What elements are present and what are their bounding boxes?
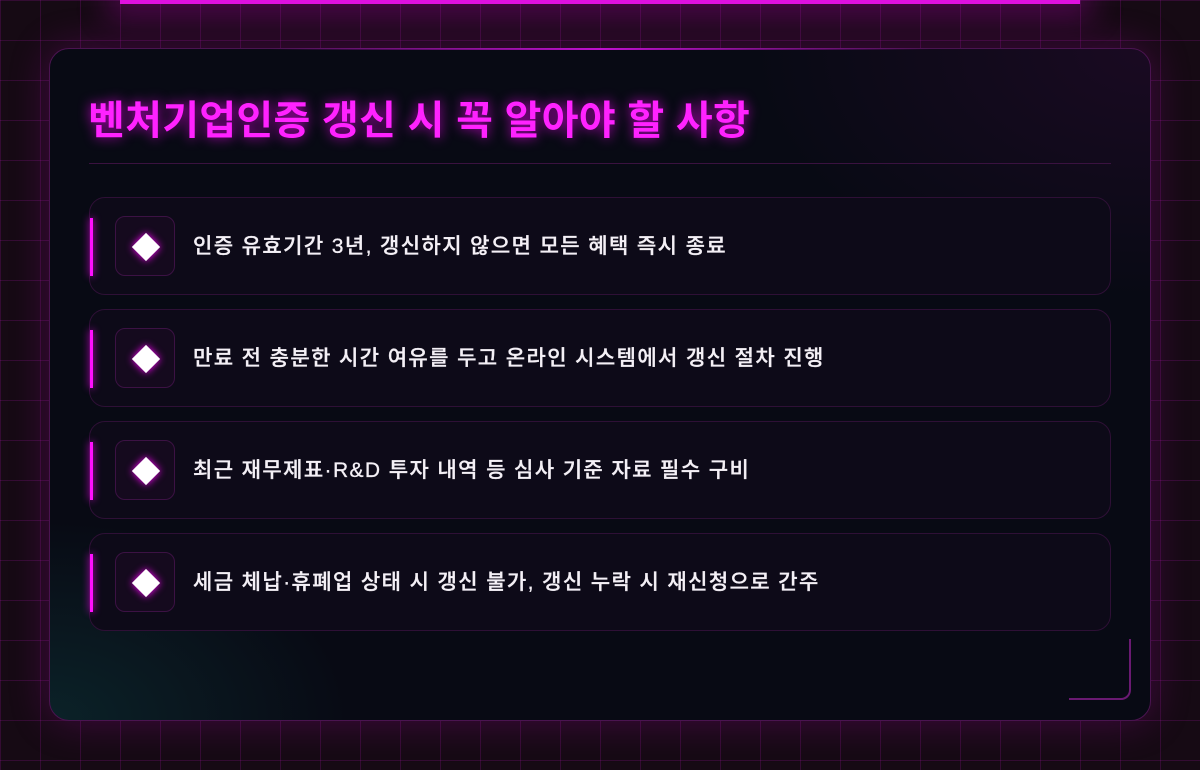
text: 최근 재무제표·R&D 투자 내역 등 심사 기준 자료 필수 구비 bbox=[193, 459, 750, 482]
text: 세금 체납·휴폐업 상태 시 갱신 불가, 갱신 누락 시 재신청으로 간주 bbox=[193, 571, 820, 594]
item 4 bbox=[89, 533, 1111, 631]
item 3 bbox=[89, 421, 1111, 519]
item 1 bbox=[89, 197, 1111, 295]
icon: diamond bbox=[115, 440, 175, 500]
icon: diamond bbox=[115, 328, 175, 388]
text: 인증 유효기간 3년, 갱신하지 않으면 모든 혜택 즉시 종료 bbox=[193, 235, 727, 258]
icon: diamond bbox=[115, 552, 175, 612]
text: 만료 전 충분한 시간 여유를 두고 온라인 시스템에서 갱신 절차 진행 bbox=[193, 347, 825, 370]
item 2 bbox=[89, 309, 1111, 407]
title: 벤처기업인증 갱신 시 꼭 알아야 할 사항 bbox=[88, 99, 750, 143]
icon: diamond bbox=[115, 216, 175, 276]
